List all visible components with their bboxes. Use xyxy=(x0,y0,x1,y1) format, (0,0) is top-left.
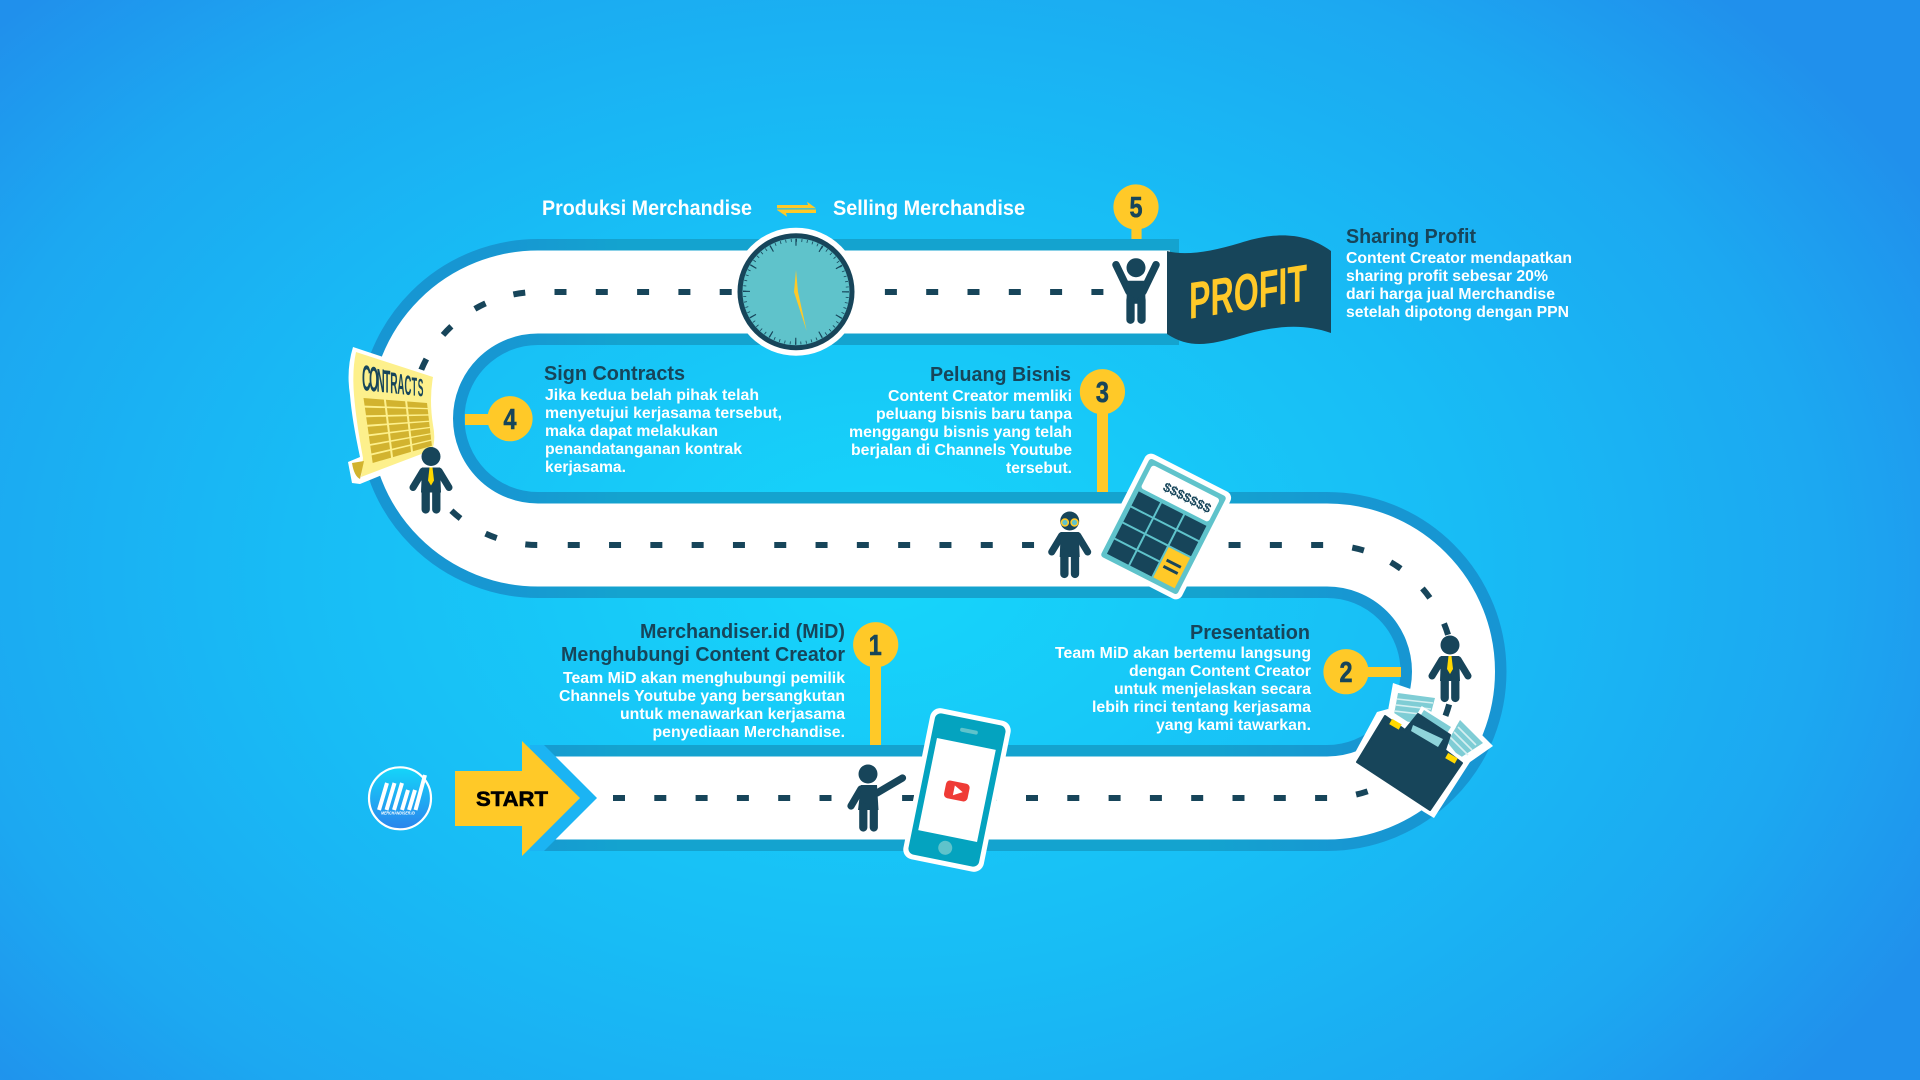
text block: Peluang Bisnis xyxy=(849,364,1072,477)
flag: profit banner xyxy=(1167,235,1331,344)
text block: Sharing Profit: Sharing Profit xyxy=(1346,226,1476,248)
icon: contract document: N xyxy=(377,363,385,400)
text block: Merchandiser.id contacts creator xyxy=(559,621,845,741)
text block: Peluang Bisnis: tersebut. xyxy=(1006,460,1072,477)
text block: Sign Contracts xyxy=(544,363,782,476)
text block: Sharing Profit: sharing profit sebesar 20% xyxy=(1346,268,1548,285)
pin 3 xyxy=(1080,369,1125,492)
icon: contract document: C xyxy=(362,358,371,399)
person: with tie near contract xyxy=(413,447,449,510)
pin 3: 3 xyxy=(1096,377,1109,409)
text block: Sign Contracts: Jika kedua belah pihak telah xyxy=(545,387,759,404)
text block: Sign Contracts: maka dapat melakukan xyxy=(545,423,718,440)
icon: contract document xyxy=(348,347,439,484)
icon: contract document: O xyxy=(369,359,378,400)
pin 5: 5 xyxy=(1130,192,1142,224)
icon: contract document: A xyxy=(397,367,405,401)
text block: Presentation xyxy=(1055,622,1311,734)
road: winding path xyxy=(412,292,1454,798)
text block: Merchandiser.id contacts creator: Team MiD akan menghubungi pemilik xyxy=(563,670,845,687)
icon: smartphone with video xyxy=(901,706,1013,874)
text block: Sign Contracts: kerjasama. xyxy=(545,459,626,476)
text block: Peluang Bisnis: peluang bisnis baru tanpa xyxy=(876,406,1072,423)
text block: Merchandiser.id contacts creator: Channels Youtube yang bersangkutan xyxy=(559,688,845,705)
icon: contract document: S xyxy=(418,373,423,402)
text block: Merchandiser.id contacts creator: penyediaan Merchandise. xyxy=(652,724,845,741)
pin 1: 1 xyxy=(869,630,882,662)
pin 2: 2 xyxy=(1340,657,1352,689)
text block: Merchandiser.id contacts creator: untuk menawarkan kerjasama xyxy=(620,706,845,723)
flag: profit banner: PROFIT xyxy=(1189,255,1307,331)
text block: Presentation: yang kami tawarkan. xyxy=(1156,717,1311,734)
icon: contract document: T xyxy=(384,364,391,401)
text block: Peluang Bisnis: Peluang Bisnis xyxy=(930,364,1071,386)
text block: Presentation: Presentation xyxy=(1190,622,1310,644)
text block: Sharing Profit: Content Creator mendapatkan xyxy=(1346,250,1572,267)
icon: contract document: C xyxy=(405,370,411,402)
text block: Peluang Bisnis: menggangu bisnis yang telah xyxy=(849,424,1072,441)
text block: Presentation: lebih rinci tentang kerjasama xyxy=(1092,699,1311,716)
logo: Merchandiser.id badge xyxy=(369,767,431,829)
text block: Merchandiser.id contacts creator: Merchandiser.id (MiD) xyxy=(640,621,845,643)
person: arms raised xyxy=(1116,258,1156,320)
text block: Peluang Bisnis: berjalan di Channels Youtube xyxy=(851,442,1072,459)
pin 4: 4 xyxy=(504,404,516,436)
text block: Sign Contracts: Sign Contracts xyxy=(544,363,685,385)
logo: Merchandiser.id badge: MERCHANDISER.ID xyxy=(381,810,416,816)
icon: contract document: R xyxy=(390,366,398,400)
start arrow: START xyxy=(476,788,548,811)
heading: Produksi Merchandise: Produksi Merchandise xyxy=(542,197,752,220)
heading: Selling Merchandise: Selling Merchandise xyxy=(833,197,1025,220)
text block: Presentation: dengan Content Creator xyxy=(1129,663,1311,680)
pin 4 xyxy=(465,396,533,441)
person: pointing xyxy=(851,764,902,828)
text block: Sharing Profit: setelah dipotong dengan PPN xyxy=(1346,304,1569,321)
icon: briefcase with papers xyxy=(1350,683,1493,818)
person: with tie near briefcase xyxy=(1432,636,1468,698)
text block: Sign Contracts: menyetujui kerjasama tersebut, xyxy=(545,405,782,422)
pin 5 xyxy=(1113,184,1159,239)
icon: exchange arrows xyxy=(777,202,816,217)
start arrow xyxy=(455,741,597,856)
icon: calculator xyxy=(1093,451,1234,602)
text block: Presentation: untuk menjelaskan secara xyxy=(1114,681,1311,698)
text block: Peluang Bisnis: Content Creator memliki xyxy=(888,388,1072,405)
text block: Sharing Profit xyxy=(1346,226,1572,321)
icon: calculator: $$$$$$$ xyxy=(1161,479,1214,516)
person: with glasses xyxy=(1052,512,1088,574)
pin 2 xyxy=(1323,649,1401,694)
text block: Presentation: Team MiD akan bertemu langsung xyxy=(1055,645,1311,662)
pin 1 xyxy=(853,622,898,745)
icon: contract document: T xyxy=(412,372,417,402)
text block: Merchandiser.id contacts creator: Menghubungi Content Creator xyxy=(561,644,845,666)
icon: clock xyxy=(732,228,860,356)
text block: Sharing Profit: dari harga jual Merchandise xyxy=(1346,286,1555,303)
text block: Sign Contracts: penandatanganan kontrak xyxy=(545,441,742,458)
